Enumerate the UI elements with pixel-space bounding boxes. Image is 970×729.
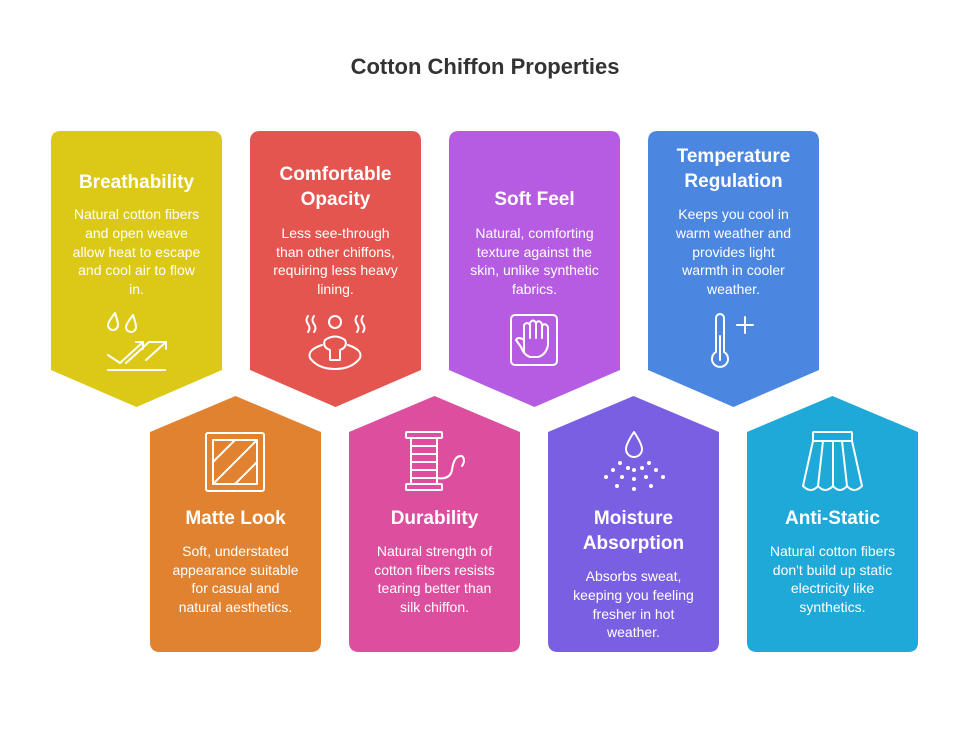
panel: moisture absorption: weather. bbox=[606, 624, 660, 640]
panel: durability: Natural strength of bbox=[377, 543, 492, 559]
panel: matte look: appearance suitable bbox=[172, 562, 299, 578]
panel: durability: silk chiffon. bbox=[400, 599, 469, 615]
icon: matte square bbox=[206, 433, 264, 491]
panel: soft feel: Soft Feel bbox=[494, 189, 575, 210]
panel: durability bbox=[349, 396, 520, 652]
panel: comfortable opacity bbox=[250, 131, 421, 407]
panel: temperature regulation: Keeps you cool in bbox=[678, 206, 789, 222]
panel: durability: cotton fibers resists bbox=[374, 562, 495, 578]
icon: thread spool bbox=[406, 432, 464, 490]
panel: comfortable opacity: Less see-through bbox=[281, 225, 390, 241]
panel: breathability: in. bbox=[129, 281, 144, 297]
panel: comfortable opacity: than other chiffons, bbox=[276, 244, 395, 260]
icon: hand on fabric bbox=[511, 315, 557, 365]
panel: moisture absorption: Absorbs sweat, bbox=[586, 568, 681, 584]
panel: temperature regulation: Temperature bbox=[677, 146, 790, 167]
panel: temperature regulation: warmth in cooler bbox=[681, 262, 785, 278]
panel: temperature regulation: warm weather and bbox=[675, 225, 791, 241]
panel: comfortable opacity: Opacity bbox=[301, 189, 371, 210]
panel: soft feel: Natural, comforting bbox=[475, 225, 594, 241]
panel: matte look: natural aesthetics. bbox=[179, 599, 292, 615]
panel: anti-static: don't build up static bbox=[773, 562, 892, 578]
panel: breathability: allow heat to escape bbox=[73, 244, 201, 260]
panel: durability: tearing better than bbox=[378, 580, 491, 596]
panel: comfortable opacity: Comfortable bbox=[280, 164, 391, 185]
panel: soft feel bbox=[449, 131, 620, 407]
panel: breathability: and cool air to flow bbox=[78, 262, 196, 278]
panel: temperature regulation: provides light bbox=[692, 244, 775, 260]
panel: temperature regulation: Regulation bbox=[684, 171, 783, 192]
panel: temperature regulation bbox=[648, 131, 819, 407]
panel: moisture absorption: fresher in hot bbox=[593, 606, 674, 622]
panel: soft feel: fabrics. bbox=[512, 281, 557, 297]
title: Cotton Chiffon Properties bbox=[351, 54, 619, 79]
panel: soft feel: texture against the bbox=[477, 244, 592, 260]
icon: person with heat bbox=[306, 316, 364, 369]
panel: anti-static: electricity like bbox=[791, 580, 874, 596]
panel: anti-static bbox=[747, 396, 918, 652]
panel: anti-static: synthetics. bbox=[799, 599, 866, 615]
panel: breathability: Natural cotton fibers bbox=[74, 206, 199, 222]
panel: matte look: Soft, understated bbox=[182, 543, 289, 559]
panel: matte look: for casual and bbox=[192, 580, 279, 596]
panel: breathability bbox=[51, 131, 222, 407]
panel: matte look: Matte Look bbox=[185, 508, 286, 529]
panel: moisture absorption bbox=[548, 396, 719, 652]
panel: comfortable opacity: lining. bbox=[317, 281, 354, 297]
panel: moisture absorption: keeping you feeling bbox=[573, 587, 694, 603]
icon: thermometer bbox=[712, 314, 753, 367]
panel: moisture absorption: Absorption bbox=[583, 533, 684, 554]
panel: anti-static: Natural cotton fibers bbox=[770, 543, 895, 559]
panel: matte look bbox=[150, 396, 321, 652]
icon: drops and arrows bbox=[108, 313, 166, 370]
icon: skirt bbox=[803, 432, 862, 490]
icon: drop with particles bbox=[604, 432, 665, 491]
panel: anti-static: Anti-Static bbox=[785, 508, 880, 529]
panel: temperature regulation: weather. bbox=[706, 281, 760, 297]
panel: comfortable opacity: requiring less heavy bbox=[273, 262, 398, 278]
panel: breathability: and open weave bbox=[85, 225, 188, 241]
panel: moisture absorption: Moisture bbox=[594, 508, 673, 529]
panel: durability: Durability bbox=[391, 508, 479, 529]
panel: breathability: Breathability bbox=[79, 172, 194, 193]
panel: soft feel: skin, unlike synthetic bbox=[470, 262, 599, 278]
